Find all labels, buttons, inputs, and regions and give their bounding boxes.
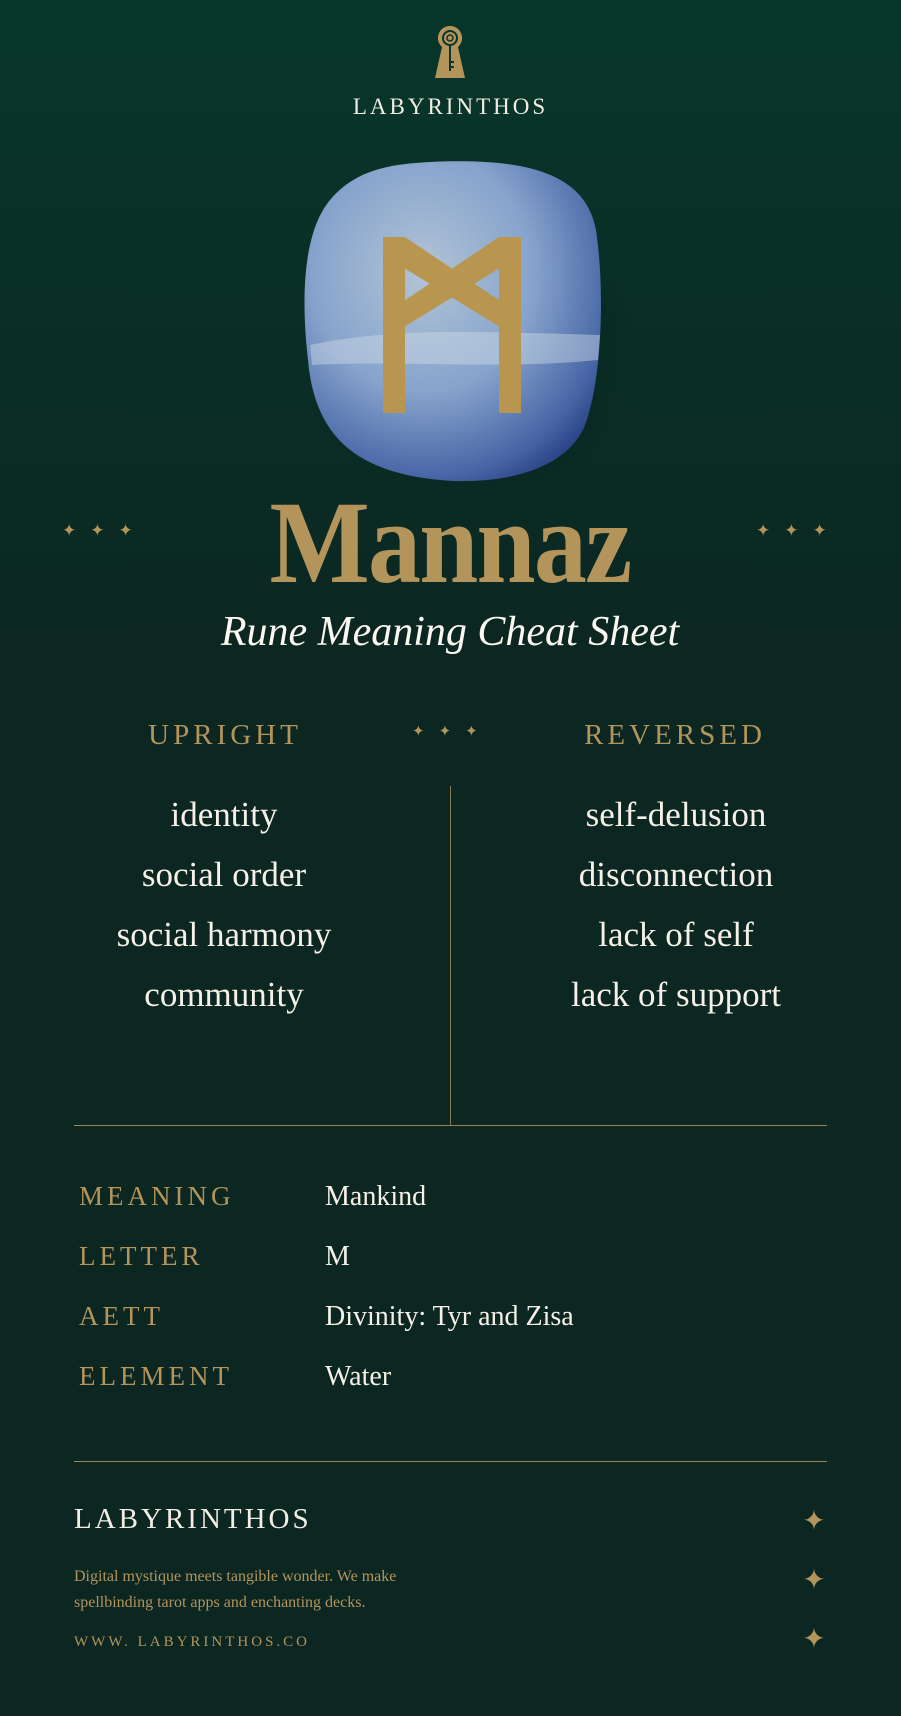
footer stars: ✦ [802,1506,826,1537]
details table: Divinity: Tyr and Zisa [325,1301,574,1332]
details table [79,1181,574,1392]
title: Mannaz: Mannaz [270,477,630,608]
list: upright: social harmony [117,915,331,954]
details table: AETT [79,1301,164,1331]
list: reversed: lack of support [571,975,781,1014]
list: reversed: lack of self [598,915,754,954]
stars center: ✦✦✦ [412,724,492,740]
footer tagline: spellbinding tarot apps and enchanting decks. [74,1594,365,1611]
subtitle: Rune Meaning Cheat Sheet [221,609,679,655]
list: reversed: self-delusion [586,795,766,834]
icon: keyhole key logo [435,26,465,78]
list: upright [117,795,332,1014]
footer stars [802,1506,826,1655]
details table: MEANING [79,1181,234,1211]
stars left: ✦✦✦ [62,521,147,540]
footer tagline [74,1568,396,1611]
footer tagline: Digital mystique meets tangible wonder. We make [74,1568,396,1585]
details table: Mankind [325,1181,426,1212]
details table: ELEMENT [79,1361,233,1391]
details table: LETTER [79,1241,203,1271]
logo text top: LABYRINTHOS [353,94,548,119]
list: upright: identity [171,795,277,834]
list: upright: community [144,975,304,1014]
illustration: rune stone [304,161,601,482]
footer stars: ✦ [802,1624,826,1655]
details table: M [325,1241,350,1272]
details table: Water [325,1361,391,1392]
heading: reversed: REVERSED [584,719,766,751]
heading: upright: UPRIGHT [148,719,302,751]
footer logo: LABYRINTHOS [74,1503,312,1535]
footer url: WWW. LABYRINTHOS.CO [74,1634,310,1650]
list: upright: social order [142,855,306,894]
footer stars: ✦ [802,1565,826,1596]
list: reversed: disconnection [579,855,773,894]
list: reversed [571,795,781,1014]
stars right: ✦✦✦ [756,521,841,540]
